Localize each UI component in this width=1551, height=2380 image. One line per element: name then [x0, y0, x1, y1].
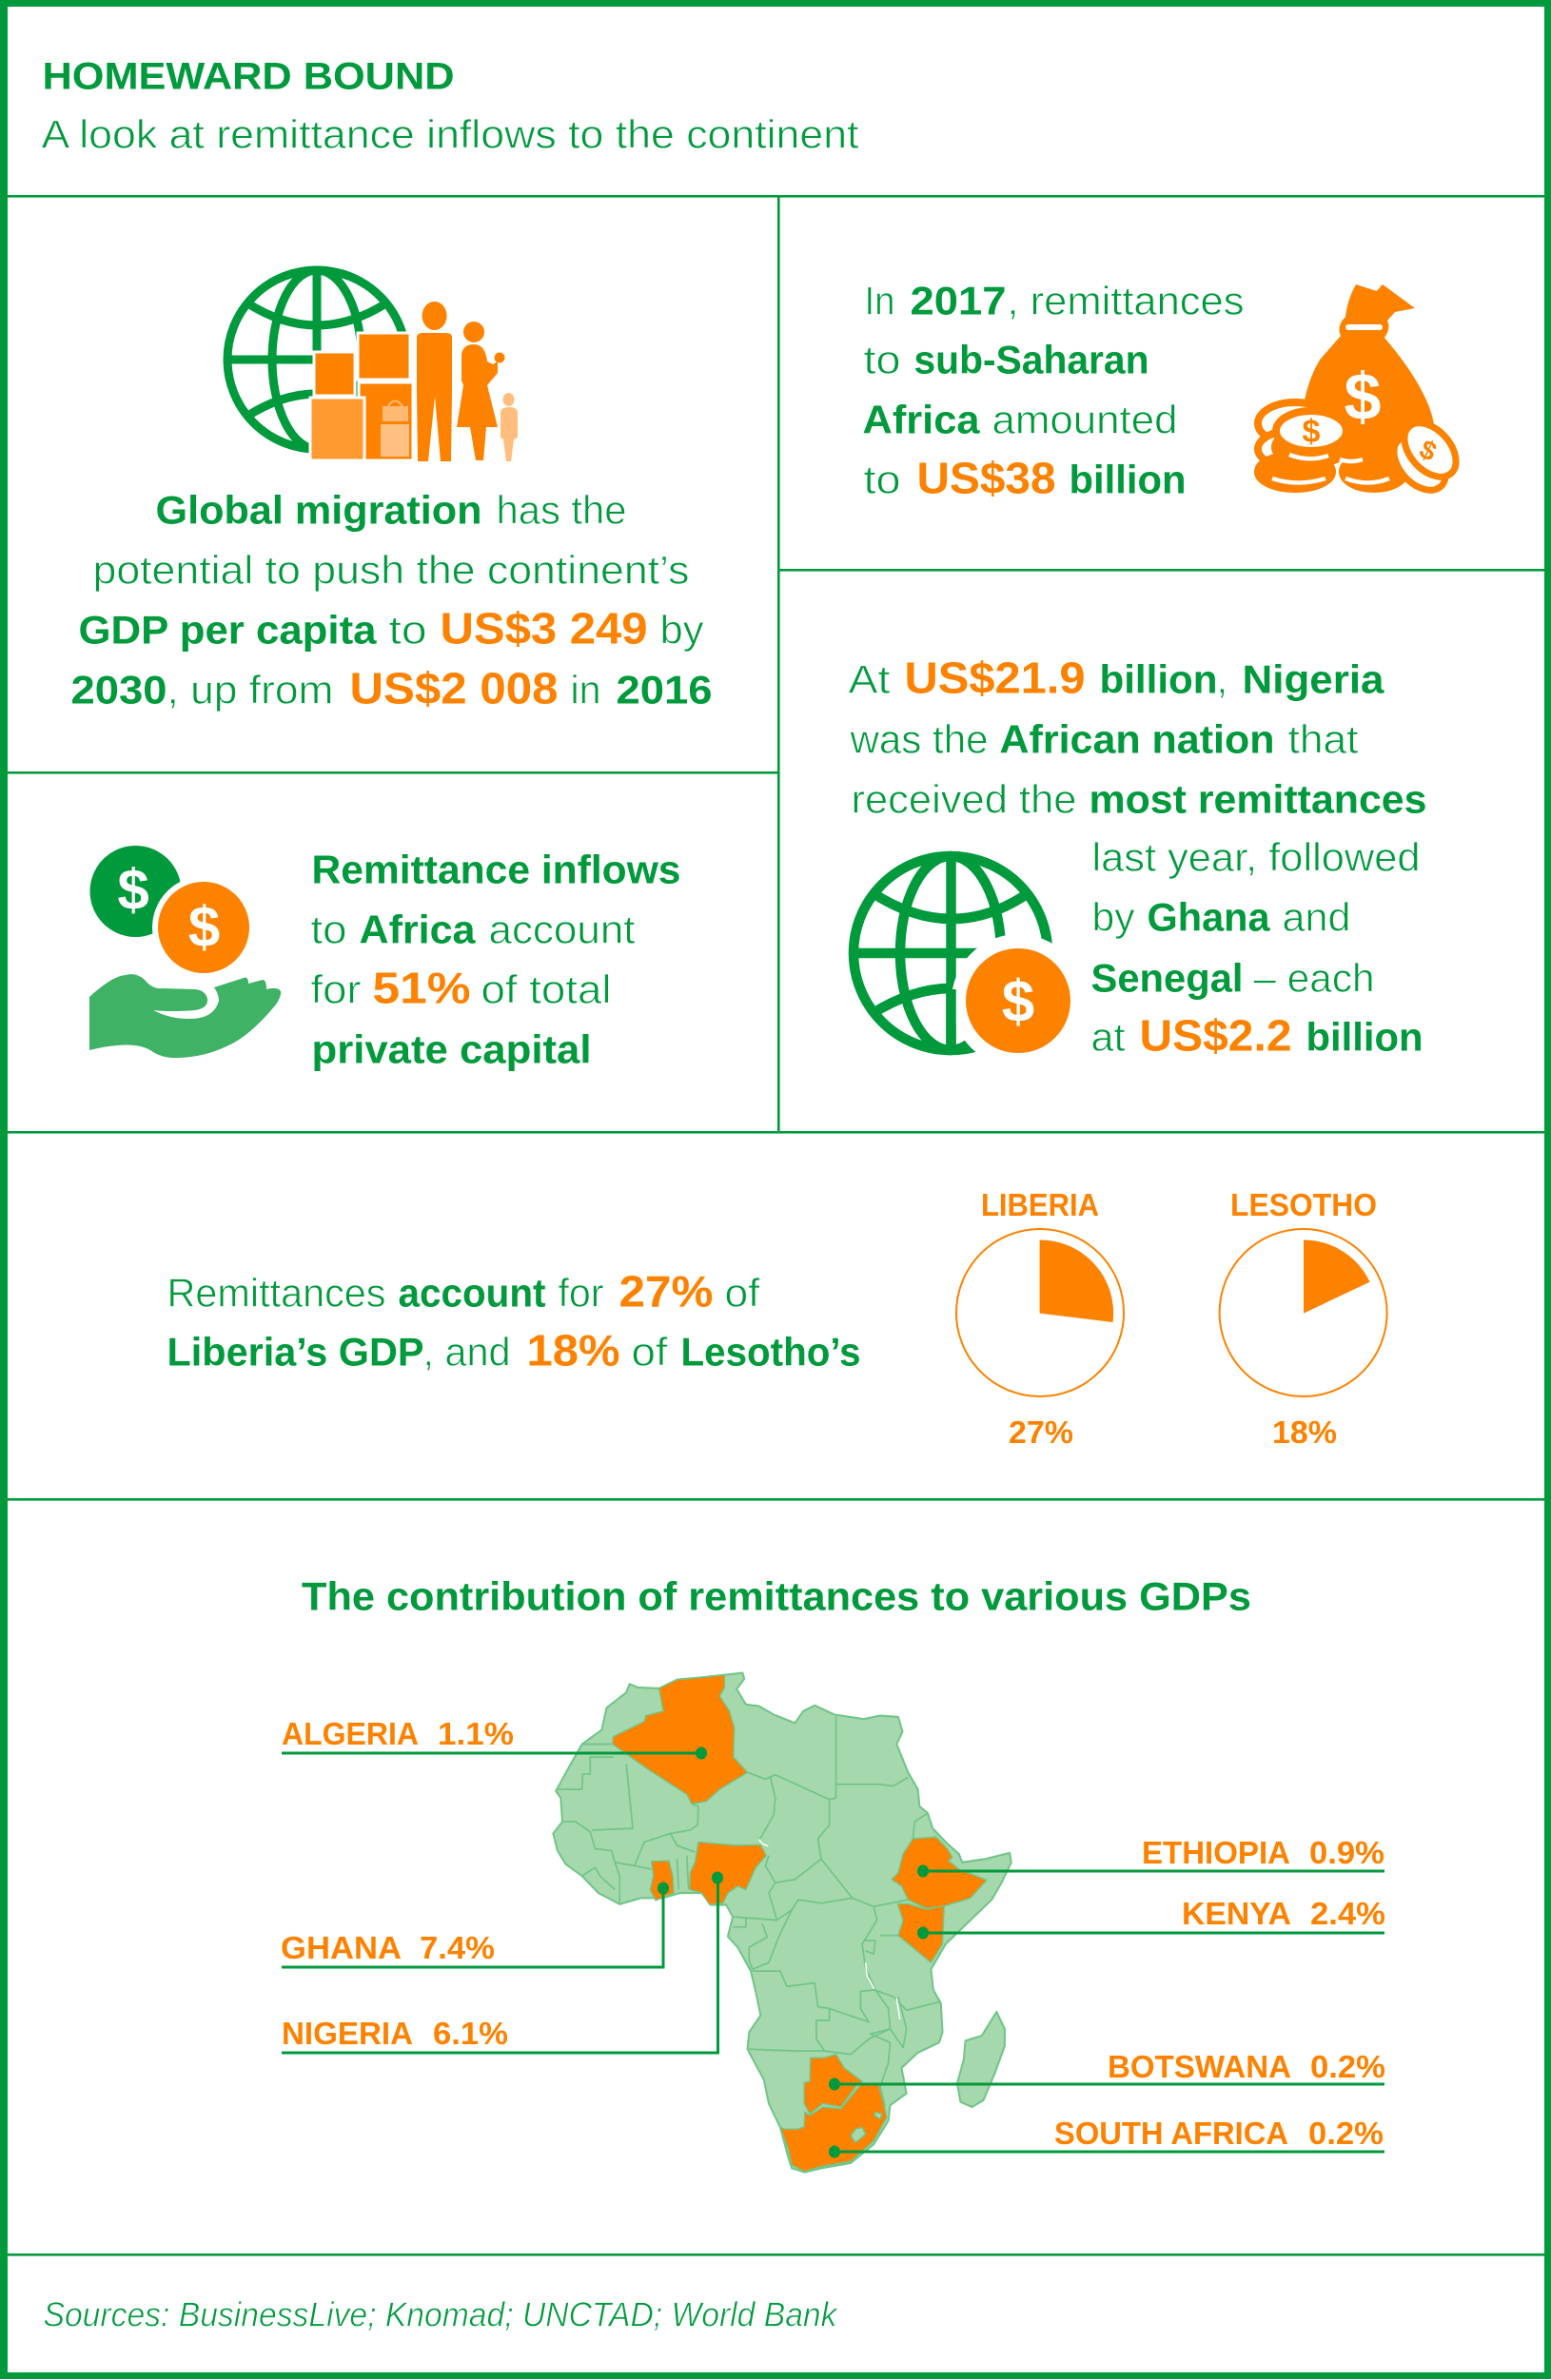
- icon: globe with coin: [854, 856, 1085, 1067]
- text: US$38 billion statement: 2017: [910, 278, 1007, 323]
- text: Nigeria statement: billion: [1100, 656, 1218, 702]
- text: global migration statement: has the: [497, 487, 626, 533]
- text: 51% of private capital: for: [310, 966, 362, 1012]
- map of Africa: [553, 1673, 1011, 2173]
- pie chart: Lesotho 18%: 18%: [1272, 1414, 1337, 1450]
- text: global migration statement: 2030: [70, 668, 167, 712]
- callout: Nigeria 6.1%: 6.1%: [433, 2016, 508, 2051]
- text: Nigeria statement: was the: [849, 717, 988, 761]
- text: Liberia and Lesotho statement: Lesotho’s: [681, 1330, 860, 1374]
- text: Nigeria statement: Nigeria: [1243, 656, 1384, 702]
- text: Nigeria statement: – each: [1254, 955, 1374, 1001]
- callout: Algeria 1.1%: 1.1%: [438, 1716, 514, 1751]
- text: US$38 billion statement: amounted: [991, 398, 1178, 441]
- text: 51% of private capital: 51%: [373, 963, 470, 1012]
- text: Nigeria statement: billion: [1306, 1014, 1423, 1060]
- pie chart: Lesotho 18%: LESOTHO: [1230, 1187, 1377, 1222]
- text: Liberia and Lesotho statement: for: [558, 1271, 604, 1315]
- text: global migration statement: US$3 249: [440, 603, 647, 653]
- text: global migration statement: to: [388, 607, 426, 653]
- callout: Botswana 0.2%: BOTSWANA: [1108, 2049, 1291, 2084]
- pie chart: Liberia 27%: LIBERIA: [981, 1187, 1099, 1222]
- callout: Ghana 7.4%: 7.4%: [420, 1930, 495, 1965]
- callout: Nigeria 6.1%: [282, 1872, 723, 2053]
- text: Nigeria statement: most remittances: [1089, 776, 1427, 822]
- callout: Ethiopia 0.9%: [917, 1835, 1384, 1878]
- text: US$38 billion statement: to: [864, 457, 900, 502]
- man: [417, 302, 452, 461]
- lakes: [759, 1840, 900, 2019]
- text: 51% of private capital: [310, 847, 681, 1071]
- text: Liberia and Lesotho statement: account: [398, 1271, 546, 1315]
- callout: South Africa 0.2%: [829, 2116, 1384, 2157]
- icon: money bag and coins: $: [1345, 360, 1381, 434]
- icon: hand with coins: $: [188, 895, 220, 959]
- callout: Ghana 7.4%: [281, 1882, 669, 1967]
- text: Liberia and Lesotho statement: Remittances: [167, 1271, 386, 1315]
- callout: Botswana 0.2%: [829, 2049, 1385, 2091]
- text: global migration statement: by: [660, 607, 704, 653]
- text: US$38 billion statement: [862, 278, 1245, 502]
- icon: money bag and coins: [1258, 284, 1466, 500]
- panel: header: [42, 55, 859, 156]
- callout: Botswana 0.2%: 0.2%: [1310, 2049, 1385, 2084]
- callout: Algeria 1.1%: ALGERIA: [282, 1716, 419, 1751]
- text: US$38 billion statement: In: [864, 278, 894, 323]
- panel: sub-Saharan remittances: [862, 278, 1466, 502]
- text: US$38 billion statement: Africa: [862, 398, 980, 441]
- text: Nigeria statement: and: [1283, 894, 1351, 940]
- text: 51% of private capital: private capital: [312, 1027, 592, 1071]
- text: Nigeria statement: by: [1092, 894, 1134, 940]
- text: global migration statement: potential to push the continent’s: [93, 548, 689, 592]
- text: US$38 billion statement: , remittances: [1007, 278, 1245, 323]
- text: global migration statement: 2016: [617, 668, 712, 712]
- callout: Kenya 2.4%: KENYA: [1182, 1896, 1291, 1931]
- text: Nigeria statement: Ghana: [1148, 894, 1270, 940]
- icon: hand with coins: $: [117, 858, 149, 922]
- text: US$38 billion statement: billion: [1070, 457, 1186, 502]
- panel: remittance inflows share: [89, 846, 681, 1071]
- icon: money bag and coins: $: [1303, 414, 1321, 450]
- subtitle: A look at remittance inflows to the continent: [42, 112, 859, 156]
- text: Nigeria statement: that: [1288, 717, 1359, 761]
- text: Nigeria statement: Senegal: [1090, 955, 1243, 1001]
- text: global migration statement: GDP per capita: [78, 607, 377, 653]
- text: Liberia and Lesotho statement: Liberia’s GDP: [167, 1330, 424, 1374]
- text: global migration statement: [70, 487, 712, 713]
- callout: South Africa 0.2%: SOUTH AFRICA: [1054, 2116, 1288, 2151]
- icon: globe with migrant family and luggage: [227, 270, 518, 461]
- text: global migration statement: , up from: [167, 668, 333, 712]
- callout: Kenya 2.4%: 2.4%: [1310, 1896, 1385, 1931]
- text: Nigeria statement: at: [1090, 1014, 1126, 1060]
- text: 51% of private capital: to: [310, 907, 346, 951]
- text: Liberia and Lesotho statement: [167, 1267, 860, 1375]
- callout: Ethiopia 0.9%: 0.9%: [1309, 1835, 1384, 1870]
- callout: Algeria 1.1%: [282, 1716, 707, 1760]
- text: US$38 billion statement: to: [864, 337, 900, 382]
- text: Nigeria statement: received the: [851, 776, 1077, 822]
- panel: global migration: [70, 270, 712, 713]
- text: Liberia and Lesotho statement: , and: [422, 1330, 510, 1374]
- text: 51% of private capital: of total: [481, 966, 611, 1012]
- icon: globe with coin: $: [1002, 969, 1034, 1035]
- highlighted countries: [613, 1675, 987, 2172]
- title: HOMEWARD BOUND: [42, 55, 455, 97]
- text: 51% of private capital: account: [489, 907, 636, 951]
- text: global migration statement: US$2 008: [350, 664, 558, 713]
- text: Nigeria statement: last year, followed: [1092, 835, 1420, 879]
- text: Nigeria statement: At: [849, 656, 891, 702]
- callout: Ghana 7.4%: GHANA: [281, 1930, 402, 1965]
- woman with baby: [457, 322, 504, 460]
- child: [501, 393, 518, 461]
- text: 51% of private capital: Remittance inflows: [312, 847, 681, 892]
- heading: The contribution of remittances to various GDPs: [302, 1573, 1251, 1619]
- pie chart: Liberia 27%: [956, 1187, 1124, 1450]
- callout: South Africa 0.2%: 0.2%: [1308, 2116, 1384, 2151]
- pie chart: Lesotho 18%: [1220, 1187, 1387, 1450]
- callout: Ethiopia 0.9%: ETHIOPIA: [1142, 1835, 1290, 1870]
- callout: Nigeria 6.1%: NIGERIA: [282, 2016, 413, 2051]
- icon: hand with coins: [89, 846, 281, 1058]
- icon: money bag and coins: $: [1415, 434, 1442, 467]
- panel: Nigeria top recipient: [849, 653, 1427, 1067]
- panel: contribution of remittances to GDPs map: [281, 1573, 1385, 2173]
- sources footer: Sources: BusinessLive; Knomad; UNCTAD; World Bank: [44, 2294, 838, 2334]
- text: Nigeria statement: US$2.2: [1140, 1010, 1292, 1060]
- text: US$38 billion statement: sub-Saharan: [913, 337, 1149, 382]
- text: Liberia and Lesotho statement: 27%: [618, 1267, 714, 1317]
- text: Liberia and Lesotho statement: of: [632, 1330, 668, 1374]
- text: Nigeria statement: ,: [1216, 656, 1227, 702]
- text: 51% of private capital: Africa: [360, 907, 476, 951]
- text: Liberia and Lesotho statement: 18%: [527, 1326, 620, 1375]
- text: Nigeria statement: [849, 653, 1427, 1060]
- text: Nigeria statement: US$21.9: [904, 653, 1085, 702]
- text: global migration statement: Global migration: [156, 487, 481, 533]
- text: Nigeria statement: African nation: [999, 717, 1275, 761]
- text: US$38 billion statement: US$38: [917, 453, 1056, 502]
- panel: Liberia and Lesotho share of GDP: [167, 1187, 1387, 1450]
- text: global migration statement: in: [571, 668, 601, 712]
- callout: Kenya 2.4%: [917, 1896, 1385, 1939]
- text: Liberia and Lesotho statement: of: [725, 1271, 760, 1315]
- pie chart: Liberia 27%: 27%: [1009, 1414, 1073, 1450]
